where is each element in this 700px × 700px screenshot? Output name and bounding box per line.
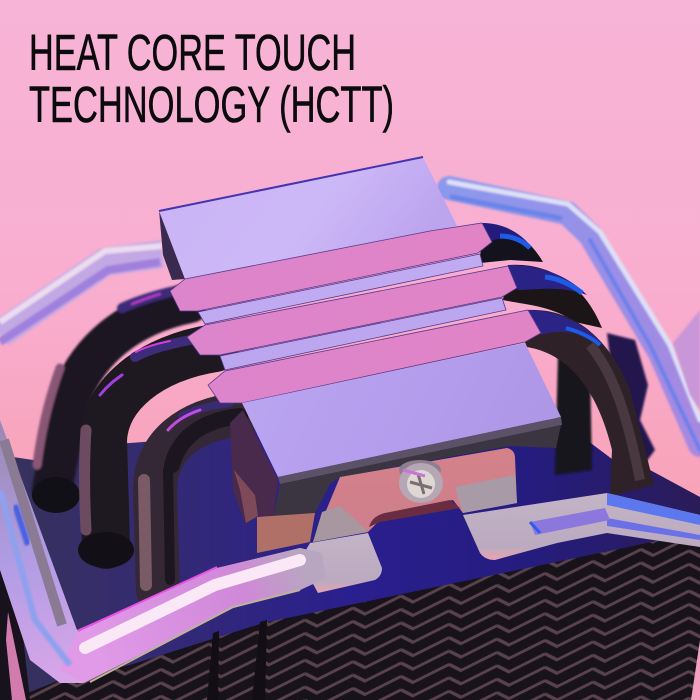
- rear centre tube post and dark back blob: [555, 333, 655, 475]
- top lavender contact plate: [159, 157, 457, 280]
- pipe 2 foot: [78, 532, 134, 568]
- heat pipe pink strips and lavender strips: [170, 223, 541, 403]
- heat pipe 2 (middle): [84, 340, 215, 545]
- right edge clip: [673, 310, 700, 410]
- metal mounting clip: [300, 448, 700, 593]
- clip back plate: [313, 448, 517, 542]
- heatsink fins: [0, 500, 700, 700]
- title line 1: HEAT CORE TOUCH: [29, 24, 356, 81]
- screw: [399, 460, 443, 503]
- heat pipe 1 (back): [37, 292, 190, 490]
- right pipe 3: [525, 310, 654, 496]
- front lavender contact plate: [242, 343, 562, 484]
- right foot and arm: [463, 493, 700, 560]
- clip right grey reflection: [455, 475, 517, 513]
- right heat pipes: [480, 223, 654, 496]
- clip left grey reflection: [313, 506, 368, 542]
- rear right wire: [449, 182, 700, 450]
- heatsink top surface: [0, 420, 700, 700]
- clip notch shadow: [369, 500, 460, 527]
- right pipe 2: [503, 265, 602, 328]
- heat block stack under plate: [230, 410, 561, 553]
- front left wire: [0, 420, 326, 683]
- wire bright highlight: [85, 560, 300, 648]
- title line 2: TECHNOLOGY (HCTT): [29, 76, 394, 133]
- heat pipe 3 (front): [144, 403, 240, 590]
- rear left wire: [0, 246, 162, 342]
- left heat pipes: [32, 292, 240, 590]
- left foot: [300, 533, 382, 593]
- title: [29, 24, 394, 133]
- right pipe 1: [480, 223, 543, 263]
- pipe 1 foot: [32, 477, 80, 513]
